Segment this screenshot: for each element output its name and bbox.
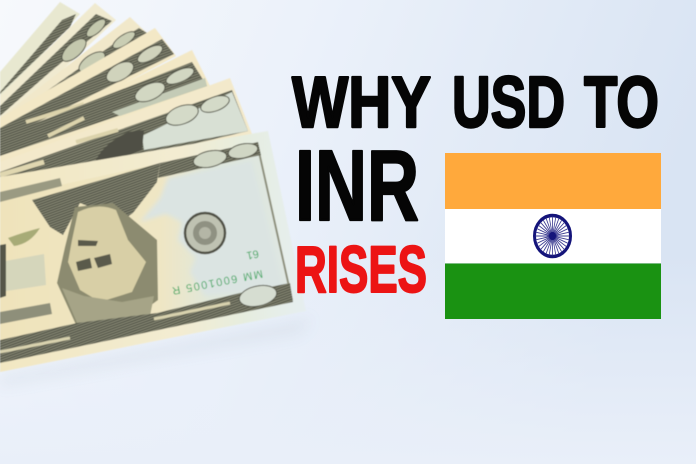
serial number: MM 6001005 R (171, 267, 264, 296)
title line 3: RISES (295, 232, 427, 306)
paper (0, 131, 306, 372)
title line 1: WHY (292, 63, 431, 143)
bottom border band (0, 283, 293, 363)
title line 1: USD (452, 63, 565, 143)
Indian flag (445, 153, 661, 319)
printed face (0, 142, 292, 355)
left denomination shapes (0, 254, 46, 292)
Ashoka Chakra (534, 215, 570, 257)
treasury emblem (8, 228, 40, 246)
top corner numerals (192, 148, 228, 170)
title line 1 (292, 63, 659, 143)
pale blue wash (140, 160, 284, 296)
back bill 5 (0, 17, 148, 140)
saffron stripe (445, 153, 661, 209)
white stripe (445, 209, 661, 263)
dark coat (32, 163, 160, 235)
top border band (158, 142, 261, 178)
back bill 3 (0, 50, 211, 174)
title line 2: INR (295, 130, 419, 242)
green stripe (445, 264, 661, 319)
back bill 7 (0, 2, 80, 100)
back bill 4 (0, 28, 176, 150)
portrait hair and face (57, 203, 158, 333)
back bill 6 (0, 3, 116, 128)
front bill (0, 131, 306, 372)
seal (185, 213, 225, 253)
title line 1: TO (584, 63, 659, 143)
right border line (257, 143, 292, 300)
back bill 2 (0, 78, 252, 200)
series number: 61 (245, 247, 260, 261)
photo: fan of dollar bills (0, 2, 312, 386)
bill shadow (0, 318, 312, 386)
